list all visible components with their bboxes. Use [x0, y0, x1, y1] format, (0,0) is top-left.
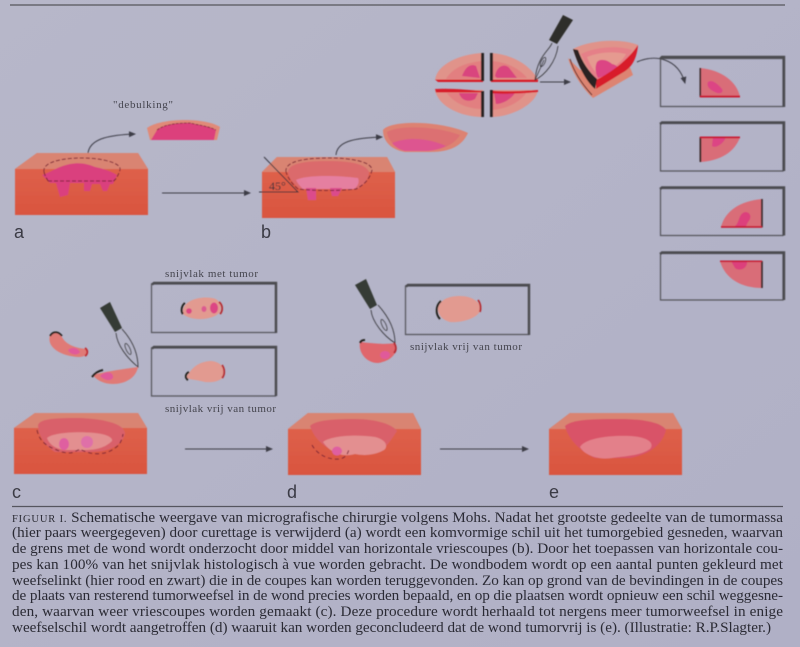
caption text: (hier paars weergegeven) door curettage is verwijderd (a) wordt een komvormige schil uit het tumorgebied gesneden, waarvan	[12, 524, 783, 541]
icon: ink pen top	[535, 15, 573, 80]
quarter: lower right	[491, 90, 538, 117]
piece c1	[49, 332, 88, 357]
slide 2	[660, 122, 784, 171]
angle lines 45 degrees	[259, 157, 298, 192]
arrow: to wedge	[540, 81, 570, 83]
label: snijvlak vrij van tumor, d: snijvlak vrij van tumor	[410, 341, 522, 353]
panel letter d: d	[287, 482, 297, 502]
label: debulking: "debulking"	[113, 99, 173, 111]
block a: skin with tumour	[15, 153, 148, 215]
arrow: to shell	[336, 137, 382, 155]
caption text: weefselinkt (hier rood en zwart) die in de coupes kan worden teruggevonden. Zo kan op grond van de bevindingen in de coupes	[12, 572, 783, 589]
panel letter c: c	[12, 482, 21, 502]
panel letter b: b	[261, 222, 271, 242]
caption text: den, waarvan weer vriescoupes worden gemaakt (c). Deze procedure wordt herhaald tot nergens meer tumorweefsel in enige	[12, 603, 783, 620]
quarter: lower left	[435, 90, 483, 117]
caption text: FIGUUR I. Schematische weergave van micrografische chirurgie volgens Mohs. Nadat het grootste gedeelte van de tumormassa	[12, 509, 783, 526]
block d: wound with one remnant	[288, 413, 421, 475]
quarter: upper right	[491, 53, 538, 80]
slide d: free of tumour	[406, 285, 529, 335]
arrow: wedge to slide	[637, 58, 685, 83]
label: snijvlak vrij van tumor: snijvlak vrij van tumor	[165, 403, 276, 415]
caption text: weefselschil wordt aangetroffen (d) waaruit kan worden geconcludeerd dat de wond tumorvrij is (e). (Illustratie: R.P.Slagter.)	[12, 619, 771, 636]
piece d	[360, 340, 396, 363]
caption text: de grens met de wond wordt onderzocht door middel van horizontale vriescoupes (b). Door het toepassen van horizontale cou-	[12, 540, 783, 557]
piece c2	[92, 367, 138, 384]
slide 1	[660, 57, 784, 107]
quarter: upper left	[435, 53, 483, 80]
arrow: to debulking	[88, 134, 135, 153]
caption text: pes kan 100% van het snijvlak histologisch à vue worden gebracht. De wondbodem wordt op een aantal punten gekleurd met	[12, 556, 784, 573]
slide c1: with tumour	[152, 283, 276, 333]
icon: ink pen c	[100, 302, 138, 367]
arrow: c to d	[185, 448, 272, 450]
slide c2: free of tumour	[152, 347, 276, 396]
label: 45 degrees: 45°	[269, 179, 286, 193]
piece: debulking	[147, 120, 220, 140]
caption text	[12, 509, 784, 636]
illustration	[14, 15, 784, 475]
top rule	[10, 4, 785, 6]
block e: tumour-free wound	[549, 413, 682, 475]
arrow: d to e	[440, 448, 528, 450]
panel letter a: a	[14, 222, 25, 242]
caption rule	[12, 506, 783, 508]
block c: wound with marked remnants	[14, 413, 147, 474]
label: snijvlak met tumor: snijvlak met tumor	[165, 268, 258, 280]
caption text: de plaats van resterend tumorweefsel in de wond precies worden bepaald, en op die plaatsen wordt opnieuw een schil weggesne-	[12, 587, 783, 604]
slide 4	[660, 252, 784, 300]
wedge: inked quarter	[568, 41, 638, 98]
panel letter e: e	[549, 482, 559, 502]
four cut quarters of shell	[435, 53, 538, 117]
piece: bowl shell	[383, 123, 468, 152]
slide 3	[660, 188, 784, 236]
block b: excision at 45 degrees	[259, 157, 395, 218]
arrow: a to b	[162, 192, 250, 194]
icon: ink pen d	[355, 279, 395, 343]
